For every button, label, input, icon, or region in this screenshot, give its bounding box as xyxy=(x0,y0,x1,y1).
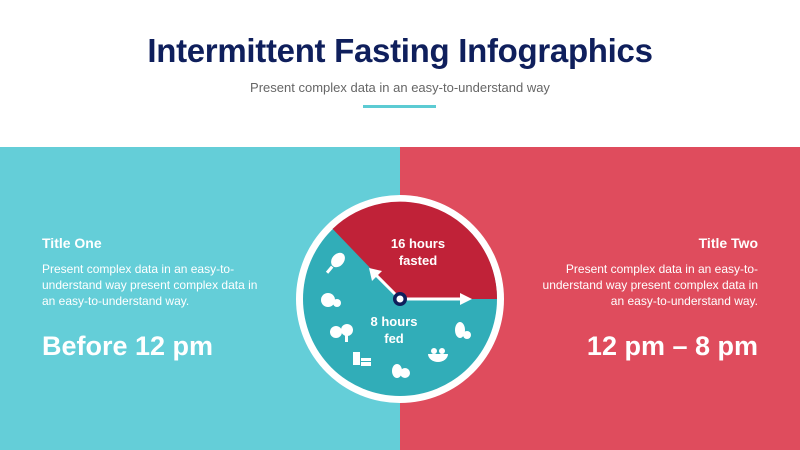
subtitle: Present complex data in an easy-to-understand way xyxy=(250,80,550,95)
fed label: 8 hours xyxy=(371,314,417,329)
clock chart: fasted xyxy=(399,253,437,268)
food icons xyxy=(321,250,471,378)
text block left: Present complex data in an easy-to-understand way present complex data in an easy-to-understand way. xyxy=(42,262,257,308)
clock chart: fed xyxy=(384,331,404,346)
fasted label: 16 hours xyxy=(391,236,445,251)
heading: title one: Title One xyxy=(42,235,102,251)
big label left: Before 12 pm xyxy=(42,331,213,361)
panel: left xyxy=(0,147,400,450)
center hub xyxy=(393,292,407,306)
big label right: 12 pm – 8 pm xyxy=(587,331,758,361)
text block right: Present complex data in an easy-to-understand way present complex data in an easy-to-understand way. xyxy=(543,262,758,308)
title: Intermittent Fasting Infographics xyxy=(147,32,653,69)
heading: title two: Title Two xyxy=(699,235,758,251)
panel: right xyxy=(400,147,800,450)
accent line xyxy=(363,105,436,108)
fasted sector xyxy=(333,202,497,299)
arrows xyxy=(369,268,472,305)
